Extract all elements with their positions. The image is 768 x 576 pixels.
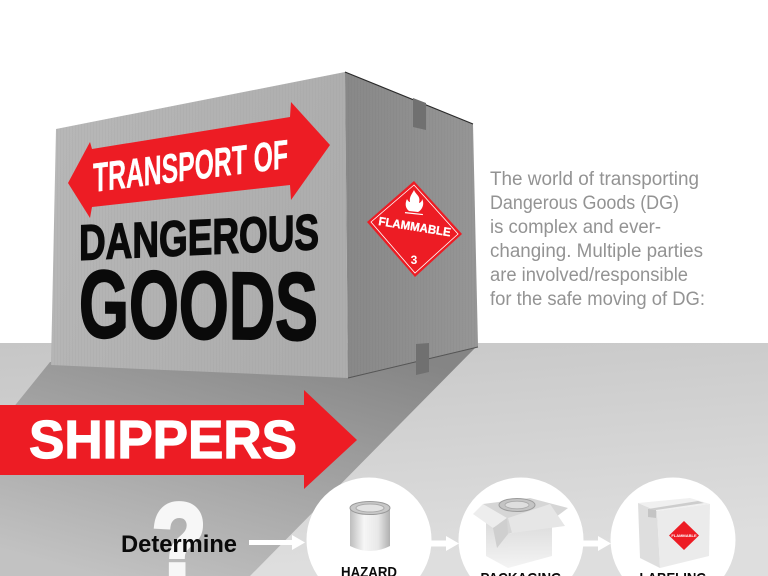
text: flammable: FLAMMABLE [378,214,452,239]
arrow: packaging to labeling [583,536,611,551]
step: labeling [610,478,736,576]
intro paragraph [490,169,705,310]
step: packaging [458,478,584,576]
icon: can [350,502,390,551]
double arrow [68,102,330,218]
intro paragraph: is complex and ever- [490,217,661,238]
text: transport of: TRANSPORT OF [93,131,288,201]
box shadow on floor [0,345,478,576]
intro paragraph: Dangerous Goods (DG) [490,193,679,214]
box side face [345,72,478,378]
shippers arrow banner [0,390,357,489]
intro paragraph: are involved/responsible [490,265,688,286]
text: determine: Determine [121,531,237,558]
text: shippers: SHIPPERS [29,410,297,470]
icon: flame [406,190,423,212]
intro paragraph: for the safe moving of DG: [490,289,705,310]
tape bottom [416,343,429,375]
step: hazard [306,478,432,576]
box front face [51,72,348,378]
intro paragraph: The world of transporting [490,169,699,190]
text: class 3: 3 [411,253,418,267]
intro paragraph: changing. Multiple parties [490,241,703,262]
floor background [0,343,768,576]
arrow: determine to hazard [249,535,305,550]
icon: open box [473,498,568,568]
text: goods: GOODS [79,251,318,361]
text: dangerous: DANGEROUS [79,204,319,271]
icon: labeled box: FLAMMABLE [671,533,697,538]
flammable placard [367,181,462,277]
cardboard box [51,72,478,378]
arrow: hazard to packaging [431,536,459,551]
tape top [413,98,426,130]
icon: mini placard [669,521,699,550]
